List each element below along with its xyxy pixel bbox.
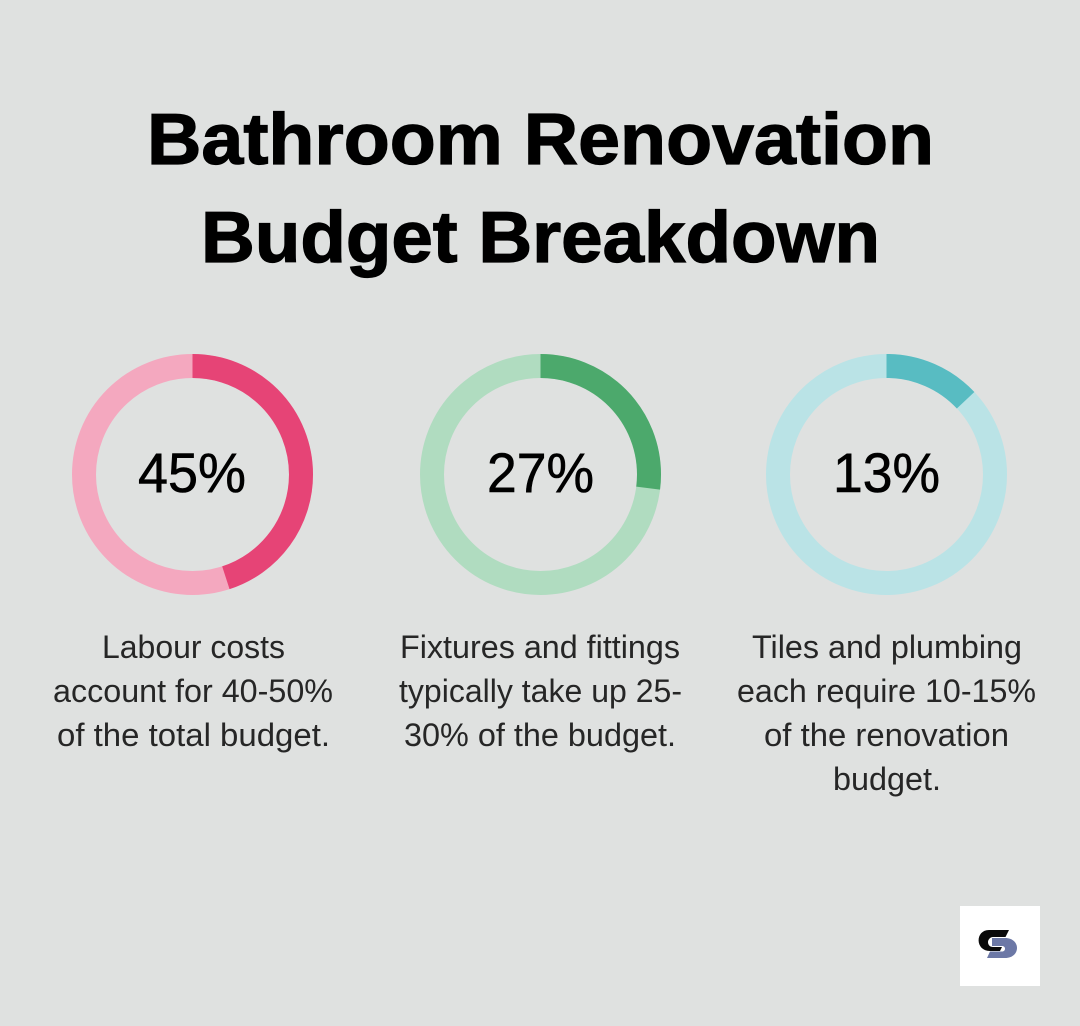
donut chart: 13% [778,366,995,583]
donut chart: 27% [432,366,649,583]
text: tiles description [737,629,1036,797]
panel: labour costs [53,366,333,753]
title: Budget Breakdown [201,198,880,278]
text: tiles description: of the renovation [764,717,1009,753]
text: fixtures description: typically take up 25- [399,673,682,709]
title: Bathroom Renovation [147,100,934,180]
text: labour description: Labour costs [102,629,285,665]
donut chart: 45%: 45% [138,441,246,504]
donut chart: 27%: 27% [487,441,594,504]
text: labour description: account for 40-50% [53,673,333,709]
logo badge [960,906,1040,986]
text: fixtures description: Fixtures and fittings [400,629,680,665]
text: labour description: of the total budget. [57,717,330,753]
text: fixtures description [399,629,682,753]
title [147,100,934,278]
panel: tiles and plumbing [737,366,1036,797]
donut chart: 45% [84,366,301,583]
text: tiles description: budget. [833,761,941,797]
panel: fixtures and fittings [399,366,682,753]
text: tiles description: Tiles and plumbing [752,629,1022,665]
text: fixtures description: 30% of the budget. [404,717,676,753]
donut chart: 13%: 13% [833,441,940,504]
text: tiles description: each require 10-15% [737,673,1036,709]
text: labour description [53,629,333,753]
